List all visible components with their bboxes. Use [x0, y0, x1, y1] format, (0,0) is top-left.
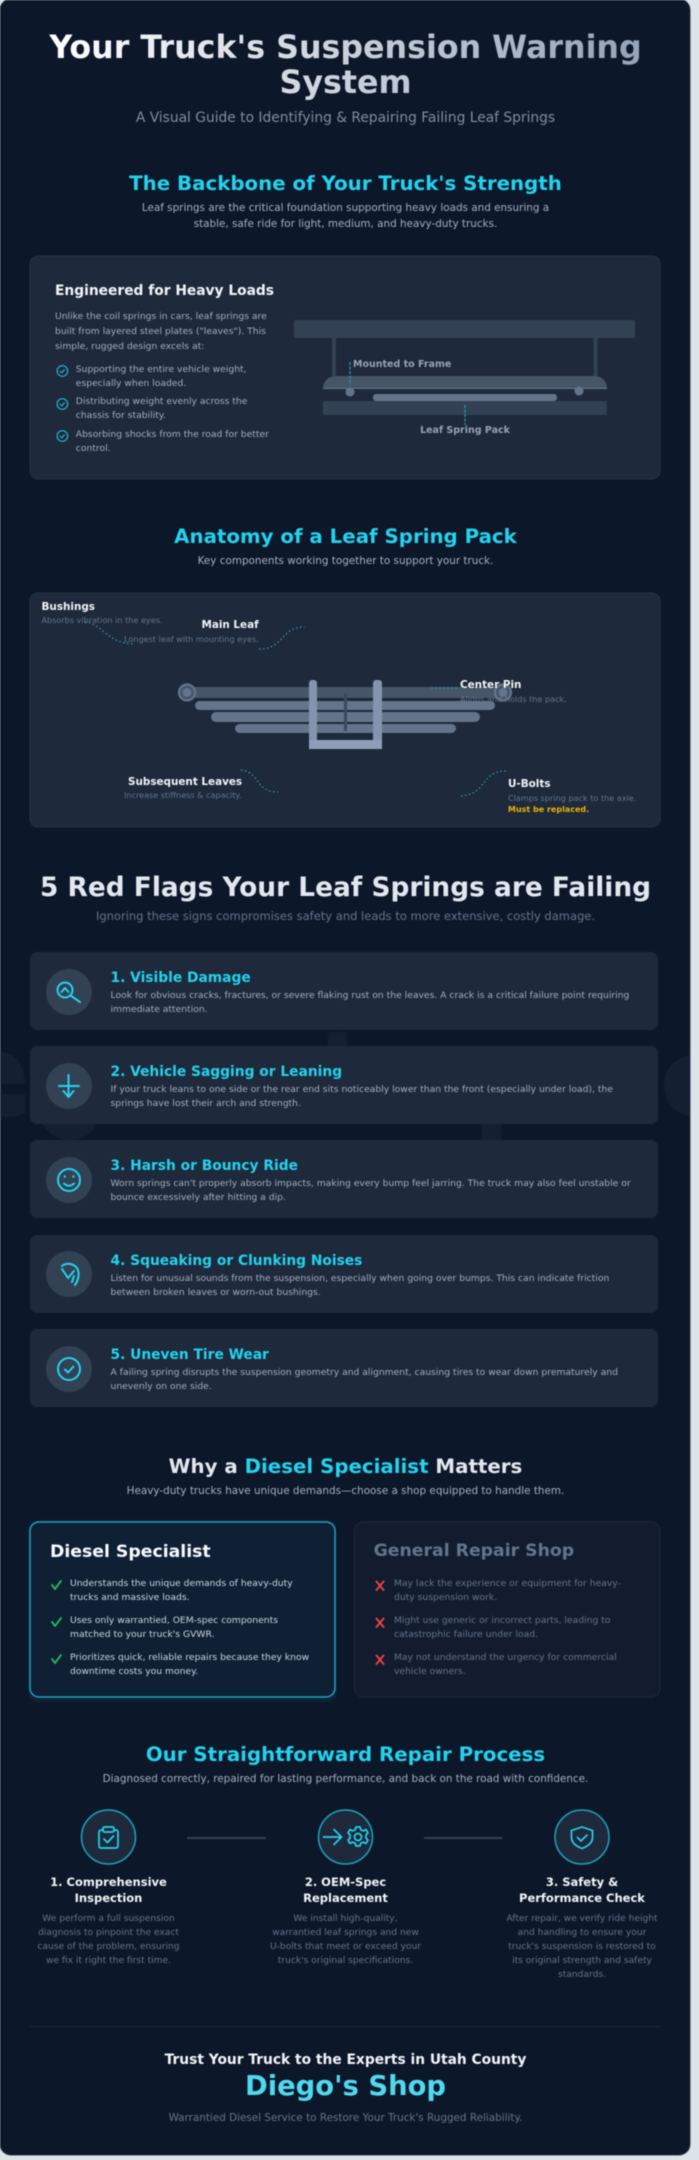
- step 1 text: We perform a full suspension: [42, 1914, 175, 1924]
- step 1 text: [37, 1914, 180, 1966]
- card text: [110, 1273, 609, 1298]
- card: tire wear: [30, 1329, 658, 1407]
- callout: bushings: Absorbs vibration in the eyes.: [42, 615, 162, 625]
- panel: general repair shop: General Repair Shop: [374, 1541, 574, 1561]
- card: harsh ride: 3. Harsh or Bouncy Ride: [110, 1158, 298, 1174]
- step 1: [37, 1810, 180, 1966]
- card: noises: [30, 1235, 658, 1313]
- list: general shop drawbacks: catastrophic failure under load.: [394, 1629, 538, 1640]
- card text: [110, 1367, 618, 1392]
- step 1: Inspection: [75, 1891, 142, 1905]
- benefit list: Absorbing shocks from the road for better: [76, 429, 269, 440]
- step 3: 3. Safety &: [546, 1875, 618, 1889]
- icon: check circle: [46, 1346, 92, 1392]
- card text: springs have lost their arch and strength.: [110, 1098, 301, 1109]
- callout: u-bolts: [461, 771, 636, 814]
- benefit list: especially when loaded.: [76, 378, 186, 389]
- step 1: 1. Comprehensive: [50, 1875, 167, 1889]
- callout: main leaf: Longest leaf with mounting eyes.: [124, 634, 259, 644]
- callout: bushings: [42, 601, 162, 644]
- step 2: Replacement: [303, 1891, 388, 1905]
- card: noises: 4. Squeaking or Clunking Noises: [110, 1253, 362, 1269]
- card text: unevenly on one side.: [110, 1381, 212, 1392]
- process connector 2: [424, 1837, 502, 1839]
- section heading: repair process: Our Straightforward Repair Process: [146, 1743, 545, 1766]
- list: general shop drawbacks: May lack the experience or equipment for heavy-: [394, 1578, 621, 1589]
- list: specialist benefits: Understands the unique demands of heavy-duty: [70, 1578, 293, 1589]
- section intro: backbone: Leaf springs are the critical foundation supporting heavy loads and ensuring a: [142, 202, 549, 214]
- panel: engineered for heavy loads: [30, 256, 660, 479]
- card text: bounce excessively after hitting a dip.: [110, 1192, 286, 1203]
- diagram: spring mounted to frame: Mounted to Frame: [353, 359, 451, 370]
- callout: u-bolts: Clamps spring pack to the axle.: [508, 793, 636, 803]
- icon: sound arc: [46, 1251, 92, 1297]
- icon: smiley: [46, 1157, 92, 1203]
- callout: bushings: Bushings: [42, 601, 95, 613]
- benefit list: chassis for stability.: [76, 410, 166, 421]
- brand name: Diego's Shop: [245, 2071, 446, 2102]
- callout: subsequent leaves: [124, 770, 278, 800]
- list: general shop drawbacks: vehicle owners.: [394, 1666, 466, 1677]
- step 3 text: and handling to ensure your: [518, 1928, 647, 1938]
- section intro: backbone: [142, 202, 549, 230]
- step 3 text: standards.: [558, 1970, 606, 1980]
- panel: leaf spring anatomy: [30, 593, 660, 827]
- list: specialist benefits: [52, 1578, 310, 1677]
- benefit list: [57, 364, 269, 454]
- panel text: [55, 311, 267, 352]
- section heading: anatomy: Anatomy of a Leaf Spring Pack: [174, 525, 518, 548]
- list: general shop drawbacks: duty suspension work.: [394, 1592, 497, 1603]
- section intro: anatomy: Key components working together to support your truck.: [198, 555, 493, 567]
- section heading: red flags: 5 Red Flags Your Leaf Springs are Failing: [40, 872, 651, 903]
- list: specialist benefits: Uses only warrantied, OEM-spec components: [70, 1615, 278, 1626]
- card: sagging: 2. Vehicle Sagging or Leaning: [110, 1064, 342, 1080]
- title: System: [280, 65, 412, 101]
- step 3 text: truck's suspension is restored to: [508, 1942, 656, 1952]
- callout: u-bolts: U-Bolts: [508, 778, 551, 790]
- list: general shop drawbacks: Might use generic or incorrect parts, leading to: [394, 1615, 611, 1626]
- process connector 1: [187, 1837, 266, 1839]
- step 2 text: warrantied leaf springs and new: [272, 1928, 419, 1938]
- card text: A failing spring disrupts the suspension geometry and alignment, causing tires to wear down prematurely and: [110, 1367, 618, 1378]
- panel: diesel specialist: [28, 1520, 337, 1702]
- panel text: built from layered steel plates ("leaves"). This: [55, 326, 266, 337]
- icon: shield check: [555, 1810, 609, 1864]
- card text: Worn springs can't properly absorb impacts, making every bump feel jarring. The truck may also feel unstable or: [110, 1178, 631, 1189]
- card text: If your truck leans to one side or the rear end sits noticeably lower than the front (especially under load), the: [110, 1084, 613, 1095]
- benefit list: control.: [76, 443, 111, 454]
- card: harsh ride: [30, 1140, 658, 1218]
- callout: u-bolts: Must be replaced.: [508, 805, 589, 814]
- step 2 text: U-bolts that meet or exceed your: [270, 1942, 421, 1952]
- card: sagging: [30, 1046, 658, 1124]
- footer call to action: Trust Your Truck to the Experts in Utah County: [165, 2052, 526, 2068]
- step 3 text: After repair, we verify ride height: [506, 1914, 658, 1924]
- title: [48, 30, 642, 101]
- callout: center pin: Center Pin: [460, 679, 521, 691]
- title: Your Truck's Suspension Warning: [48, 30, 642, 66]
- card text: immediate attention.: [110, 1004, 208, 1015]
- step 1 text: diagnosis to pinpoint the exact: [38, 1928, 179, 1938]
- section intro: repair process: Diagnosed correctly, repaired for lasting performance, and back on the road with confidence.: [103, 1773, 588, 1785]
- card text: [110, 990, 629, 1015]
- icon: clipboard: [82, 1810, 136, 1864]
- callout: center pin: [432, 679, 567, 704]
- callout: main leaf: [124, 619, 304, 649]
- step 2 text: [270, 1914, 421, 1966]
- icon: magnifier: [46, 969, 92, 1015]
- callout: main leaf: Main Leaf: [202, 619, 259, 631]
- icon: down arrow: [46, 1063, 92, 1109]
- callout: subsequent leaves: Subsequent Leaves: [128, 776, 242, 788]
- card text: Look for obvious cracks, fractures, or severe flaking rust on the leaves. A crack is a critical failure point requiring: [110, 990, 629, 1001]
- panel heading: Engineered for Heavy Loads: [55, 283, 274, 299]
- step 2: [270, 1810, 421, 1966]
- list: specialist benefits: matched to your truck's GVWR.: [70, 1629, 214, 1640]
- card text: [110, 1084, 613, 1109]
- section heading: backbone: The Backbone of Your Truck's Strength: [129, 172, 562, 195]
- footer call to action: Warrantied Diesel Service to Restore Your Truck's Rugged Reliability.: [169, 2112, 522, 2124]
- list: general shop drawbacks: May not understand the urgency for commercial: [394, 1652, 617, 1663]
- step 1 text: we fix it right the first time.: [46, 1956, 171, 1966]
- card: tire wear: 5. Uneven Tire Wear: [110, 1347, 269, 1363]
- icon: arrow and gear: [318, 1810, 372, 1864]
- panel: diesel specialist: Diesel Specialist: [50, 1542, 211, 1562]
- card text: between broken leaves or worn-out bushings.: [110, 1287, 321, 1298]
- step 2: 2. OEM-Spec: [305, 1875, 386, 1889]
- step 2 text: We install high-quality,: [293, 1914, 398, 1924]
- benefit list: Supporting the entire vehicle weight,: [76, 364, 247, 375]
- diagram: spring mounted to frame: Leaf Spring Pack: [420, 425, 511, 436]
- panel: general repair shop: [354, 1522, 660, 1697]
- step 3 text: [506, 1914, 658, 1980]
- callout: subsequent leaves: Increase stiffness & capacity.: [124, 790, 242, 800]
- card text: Listen for unusual sounds from the suspension, especially when going over bumps. This can indicate friction: [110, 1273, 609, 1284]
- section intro: red flags: Ignoring these signs compromises safety and leads to more extensive, costly damage.: [96, 909, 595, 923]
- list: specialist benefits: downtime costs you money.: [70, 1666, 198, 1677]
- step 2 text: truck's original specifications.: [278, 1956, 413, 1966]
- section intro: backbone: stable, safe ride for light, medium, and heavy-duty trucks.: [194, 218, 497, 230]
- card: visible damage: [30, 952, 658, 1030]
- diagram: spring mounted to frame: [294, 320, 635, 436]
- section heading: diesel specialist: Why a Diesel Specialist Matters: [169, 1455, 522, 1478]
- footer call to action: [165, 2052, 526, 2124]
- list: specialist benefits: trucks and massive loads.: [70, 1592, 190, 1603]
- benefit list: Distributing weight evenly across the: [76, 396, 248, 407]
- card: visible damage: 1. Visible Damage: [110, 970, 251, 986]
- step 3: Performance Check: [519, 1891, 645, 1905]
- step 1 text: cause of the problem, ensuring: [37, 1942, 180, 1952]
- step 3: [506, 1810, 658, 1980]
- list: general shop drawbacks: [376, 1578, 621, 1677]
- leaf spring diagram: [179, 680, 511, 749]
- panel text: Unlike the coil springs in cars, leaf springs are: [55, 311, 267, 322]
- callout: center pin: Aligns and holds the pack.: [460, 694, 567, 704]
- section intro: diesel specialist: Heavy-duty trucks have unique demands—choose a shop equipped to handle them.: [127, 1485, 564, 1497]
- list: specialist benefits: Prioritizes quick, reliable repairs because they know: [70, 1652, 310, 1663]
- panel text: simple, rugged design excels at:: [55, 341, 204, 352]
- card text: [110, 1178, 631, 1203]
- subtitle: A Visual Guide to Identifying & Repairing Failing Leaf Springs: [136, 110, 555, 126]
- step 3 text: its original strength and safety: [512, 1956, 653, 1966]
